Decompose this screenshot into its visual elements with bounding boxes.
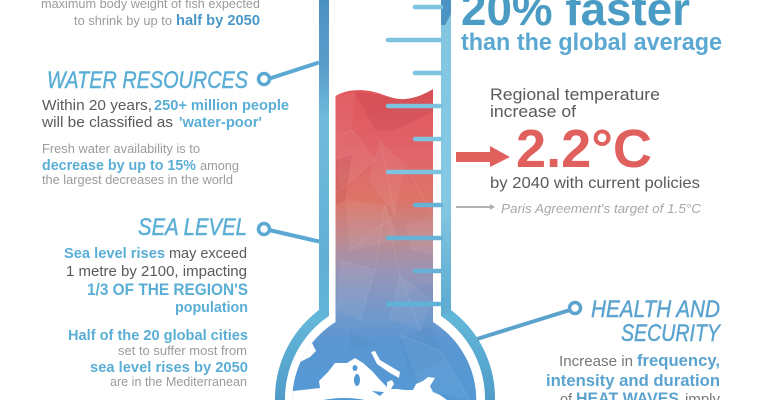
water text: Within 20 years, <box>42 98 152 114</box>
sea marker <box>258 224 270 234</box>
temperature intro: Regional temperature <box>490 86 660 104</box>
panel: regional temperature <box>456 86 702 216</box>
wall dark facet <box>441 0 451 25</box>
health heading: HEALTH AND <box>591 296 720 323</box>
water text: 'water-poor' <box>179 115 262 131</box>
sea text: sea level rises by 2050 <box>90 360 248 376</box>
health text: frequency, <box>637 352 720 370</box>
gray arrow <box>456 204 495 210</box>
sea text: Half of the 20 global cities <box>68 328 248 344</box>
thermometer glass wall <box>275 0 495 400</box>
health heading <box>591 296 722 347</box>
Paris target: Paris Agreement's target of 1.5°C <box>501 201 702 216</box>
health heading: SECURITY <box>621 320 722 347</box>
sea text: Sea level rises <box>64 246 165 262</box>
water text: decrease by up to 15% <box>42 158 196 174</box>
sea text: 1/3 OF THE REGION'S <box>87 280 248 299</box>
water marker <box>258 74 270 84</box>
panel: fish <box>41 0 260 29</box>
water text: the largest decreases in the world <box>42 172 233 187</box>
sea text: may exceed <box>169 246 247 262</box>
fish highlight: half by 2050 <box>176 13 260 29</box>
panel: water resources <box>41 62 319 187</box>
thermometer <box>275 0 495 400</box>
temperature scale ticks <box>388 7 441 304</box>
health text: Increase in <box>559 354 633 370</box>
health marker <box>570 302 580 314</box>
than the global average: than the global average <box>461 29 722 56</box>
right wall highlight <box>441 0 451 316</box>
panel: sea level <box>64 214 319 389</box>
sea text: population <box>175 300 248 316</box>
sea text <box>64 246 248 389</box>
water heading: WATER RESOURCES <box>47 67 248 94</box>
water text: among <box>200 158 239 173</box>
water text: will be classified as <box>41 115 173 131</box>
water text <box>41 98 289 187</box>
sea text: 1 metre by 2100, impacting <box>66 264 247 280</box>
current policies: by 2040 with current policies <box>490 175 700 192</box>
water text: 250+ million people <box>154 98 289 114</box>
panel: warming rate <box>461 0 722 56</box>
water text: Fresh water availability is to <box>42 141 200 156</box>
health text <box>546 352 721 400</box>
water connector <box>268 62 319 79</box>
map: Mediterranean land <box>292 343 447 400</box>
sea text: are in the Mediterranean <box>110 374 247 389</box>
fish text line 2: to shrink by up to <box>74 13 172 28</box>
sea connector <box>269 230 319 242</box>
sea text: set to suffer most from <box>118 343 247 358</box>
2.2°C: 2.2°C <box>516 119 652 179</box>
liquid with low-poly facets <box>292 89 476 400</box>
health connector <box>477 310 570 339</box>
health text: intensity and duration <box>546 372 720 390</box>
panel: health and security <box>477 296 722 400</box>
sea heading: SEA LEVEL <box>138 214 247 241</box>
red arrow <box>456 146 510 167</box>
panel: regional temperature: increase of <box>490 103 576 121</box>
